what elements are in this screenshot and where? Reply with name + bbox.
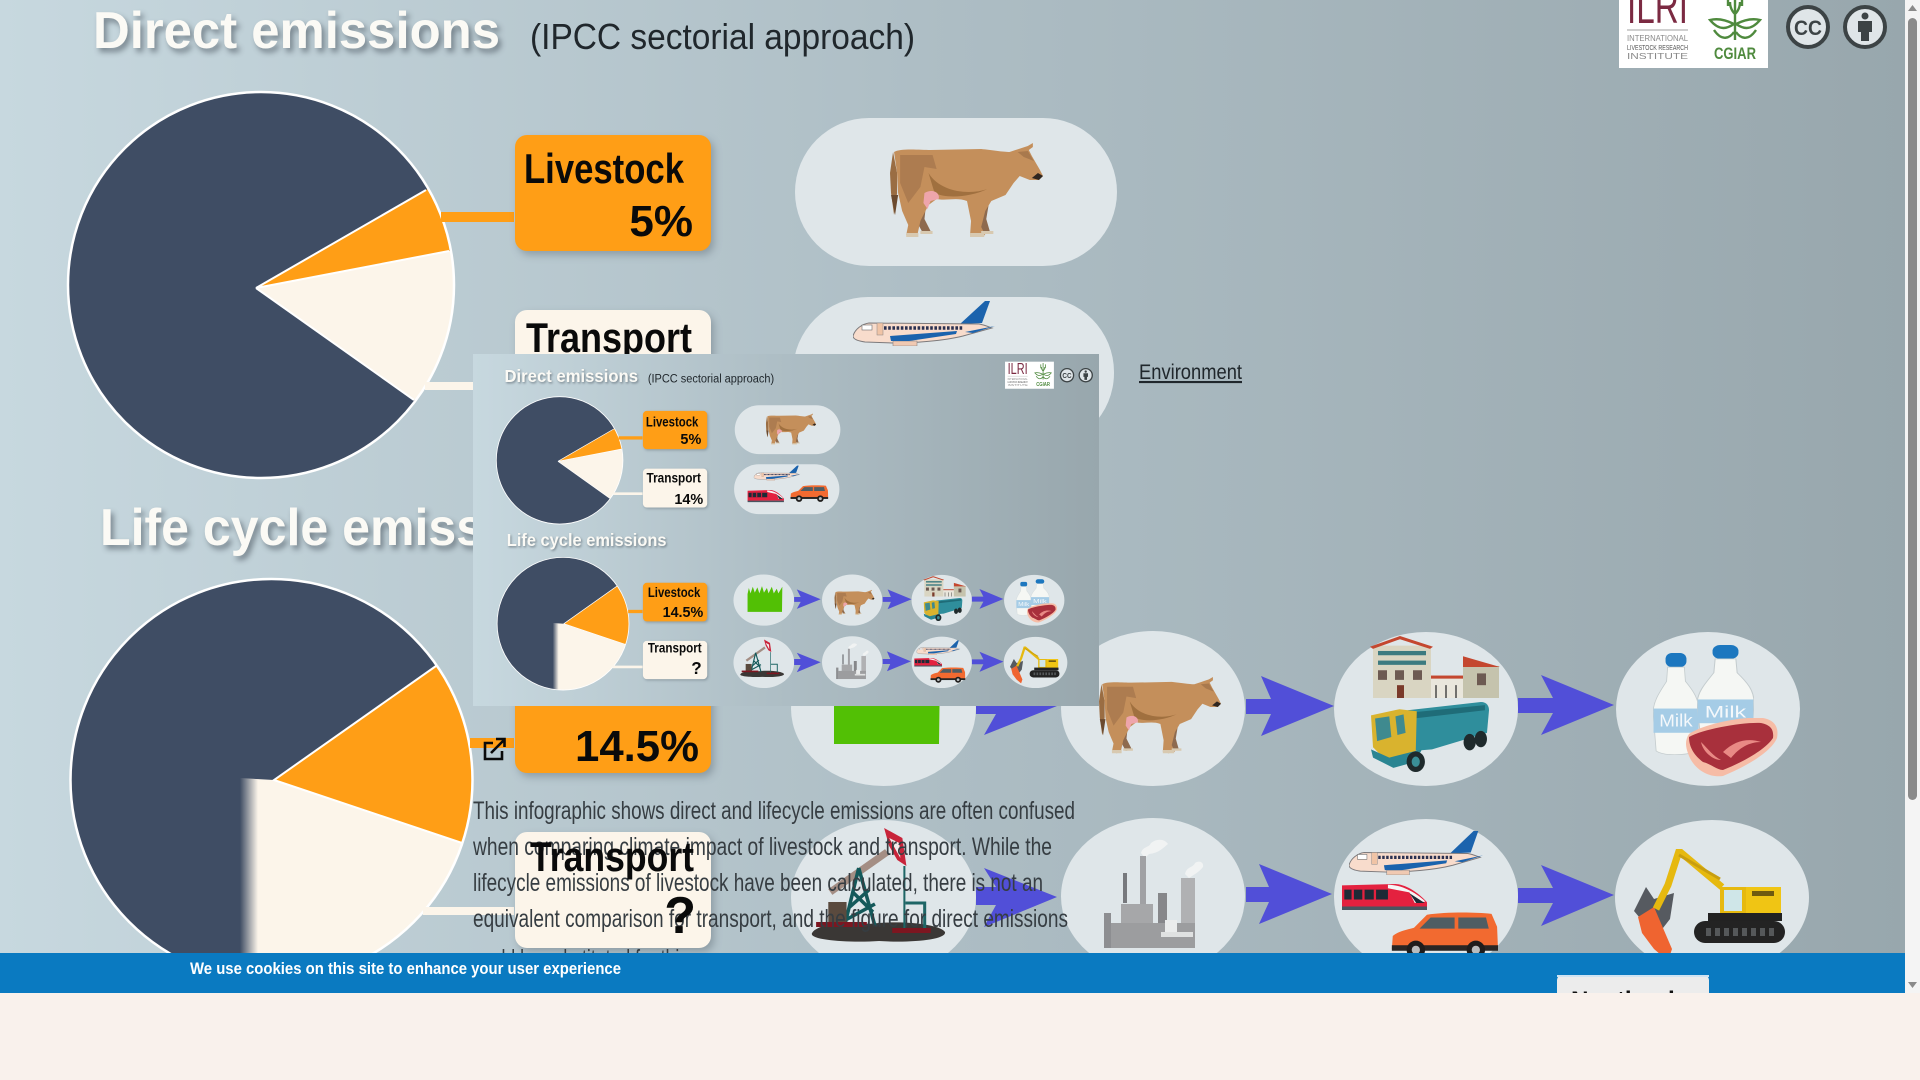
main text labels (93, 2, 915, 771)
cookie banner: We use cookies on this site to enhance your user experience (190, 959, 621, 978)
icons: plane, train and car chain (1342, 831, 1498, 959)
logo: ILRI and CGIAR: INTERNATIONAL (1627, 34, 1689, 43)
thumbnail preview of the infographic (473, 354, 1099, 706)
value: 5 percent: 5% (629, 197, 693, 246)
icon: attribution person (1845, 7, 1885, 47)
page footer area (0, 993, 1920, 1080)
connector: transport direct (425, 382, 514, 390)
title: direct emissions: Direct emissions (93, 2, 500, 60)
thumbnail text: Transport (647, 469, 701, 485)
description paragraph: lifecycle emissions of livestock have been calculated, there is not an (473, 869, 1043, 897)
capsule: livestock direct (795, 118, 1117, 266)
label box: livestock direct (515, 135, 711, 251)
title: life cycle emissions: Life cycle emissions (100, 499, 587, 557)
label box: transport direct (515, 310, 711, 428)
label: transport direct: Transport (526, 314, 692, 361)
link: Environment: Environment (1139, 361, 1242, 384)
icon: external link (485, 739, 504, 759)
icon: excavator (1634, 851, 1785, 961)
thumbnail text: Direct emissions (505, 367, 638, 386)
label: livestock life cycle: Livestock (530, 661, 691, 708)
arrows: transport chain (976, 864, 1614, 927)
icon: oil pumpjack (812, 828, 945, 942)
capsule: transport direct (793, 297, 1114, 448)
cookie banner (0, 953, 1905, 1014)
value: 14.5 percent: 14.5% (575, 722, 699, 771)
thumbnail text: Livestock (648, 584, 701, 600)
icons: plane, train and car (834, 301, 1080, 412)
thumbnail text: 5% (680, 432, 701, 448)
thumbnail text (505, 367, 774, 678)
label: livestock direct: Livestock (524, 145, 685, 192)
thumbnail text: ? (691, 659, 702, 678)
connector: livestock life cycle (470, 738, 514, 748)
logo: ILRI and CGIAR: LIVESTOCK RESEARCH (1627, 43, 1688, 52)
cookie banner: No, thanks (1571, 987, 1695, 1014)
logo: ILRI and CGIAR: INSTITUTE (1627, 52, 1688, 61)
subtitle: IPCC sectorial approach: (IPCC sectorial approach) (530, 16, 915, 57)
value: 14 percent: 14% (611, 378, 699, 427)
icons: milk and meat (1653, 645, 1777, 776)
icon: creative commons: CC (1794, 17, 1822, 40)
thumbnail text: Transport (648, 640, 702, 656)
label box: transport life cycle (515, 832, 711, 948)
pie chart: direct emissions (68, 92, 480, 478)
thumbnail text: 14% (674, 492, 703, 508)
connector: transport life cycle (423, 907, 514, 915)
icon: cow small (1099, 677, 1221, 753)
value: question mark: ? (664, 887, 696, 945)
logo: ILRI and CGIAR (1619, 0, 1768, 68)
label box: livestock life cycle (515, 656, 711, 773)
connector: livestock direct (441, 212, 514, 222)
description paragraph: could be substituted for this. (473, 945, 693, 973)
scrollbar (1905, 0, 1920, 993)
thumbnail text: 14.5% (663, 605, 703, 621)
description paragraph: This infographic shows direct and lifecycle emissions are often confused (473, 797, 1075, 825)
description paragraph (472, 797, 1075, 973)
thumbnail text: Life cycle emissions (507, 531, 667, 550)
pie chart: life cycle emissions (70, 579, 500, 1000)
logo: ILRI and CGIAR: CGIAR (1714, 44, 1756, 63)
icon: grass (834, 666, 940, 744)
description paragraph: equivalent comparison for transport, and the figure for direct emissions (473, 905, 1068, 933)
thumbnail text: Livestock (646, 414, 699, 430)
label: transport life cycle: Transport (530, 833, 694, 880)
arrows: livestock chain (976, 675, 1614, 736)
icon: cow (890, 143, 1043, 237)
icon: creative commons (1788, 7, 1828, 47)
thumbnail text: (IPCC sectorial approach) (648, 371, 774, 385)
icons: building and truck (1370, 636, 1500, 772)
description paragraph: when comparing climate impact of livestock and transport. While the (472, 833, 1052, 861)
row: transport life cycle capsules (791, 818, 1809, 975)
icon: factory (1104, 840, 1203, 948)
row: livestock life cycle capsules (791, 631, 1800, 786)
